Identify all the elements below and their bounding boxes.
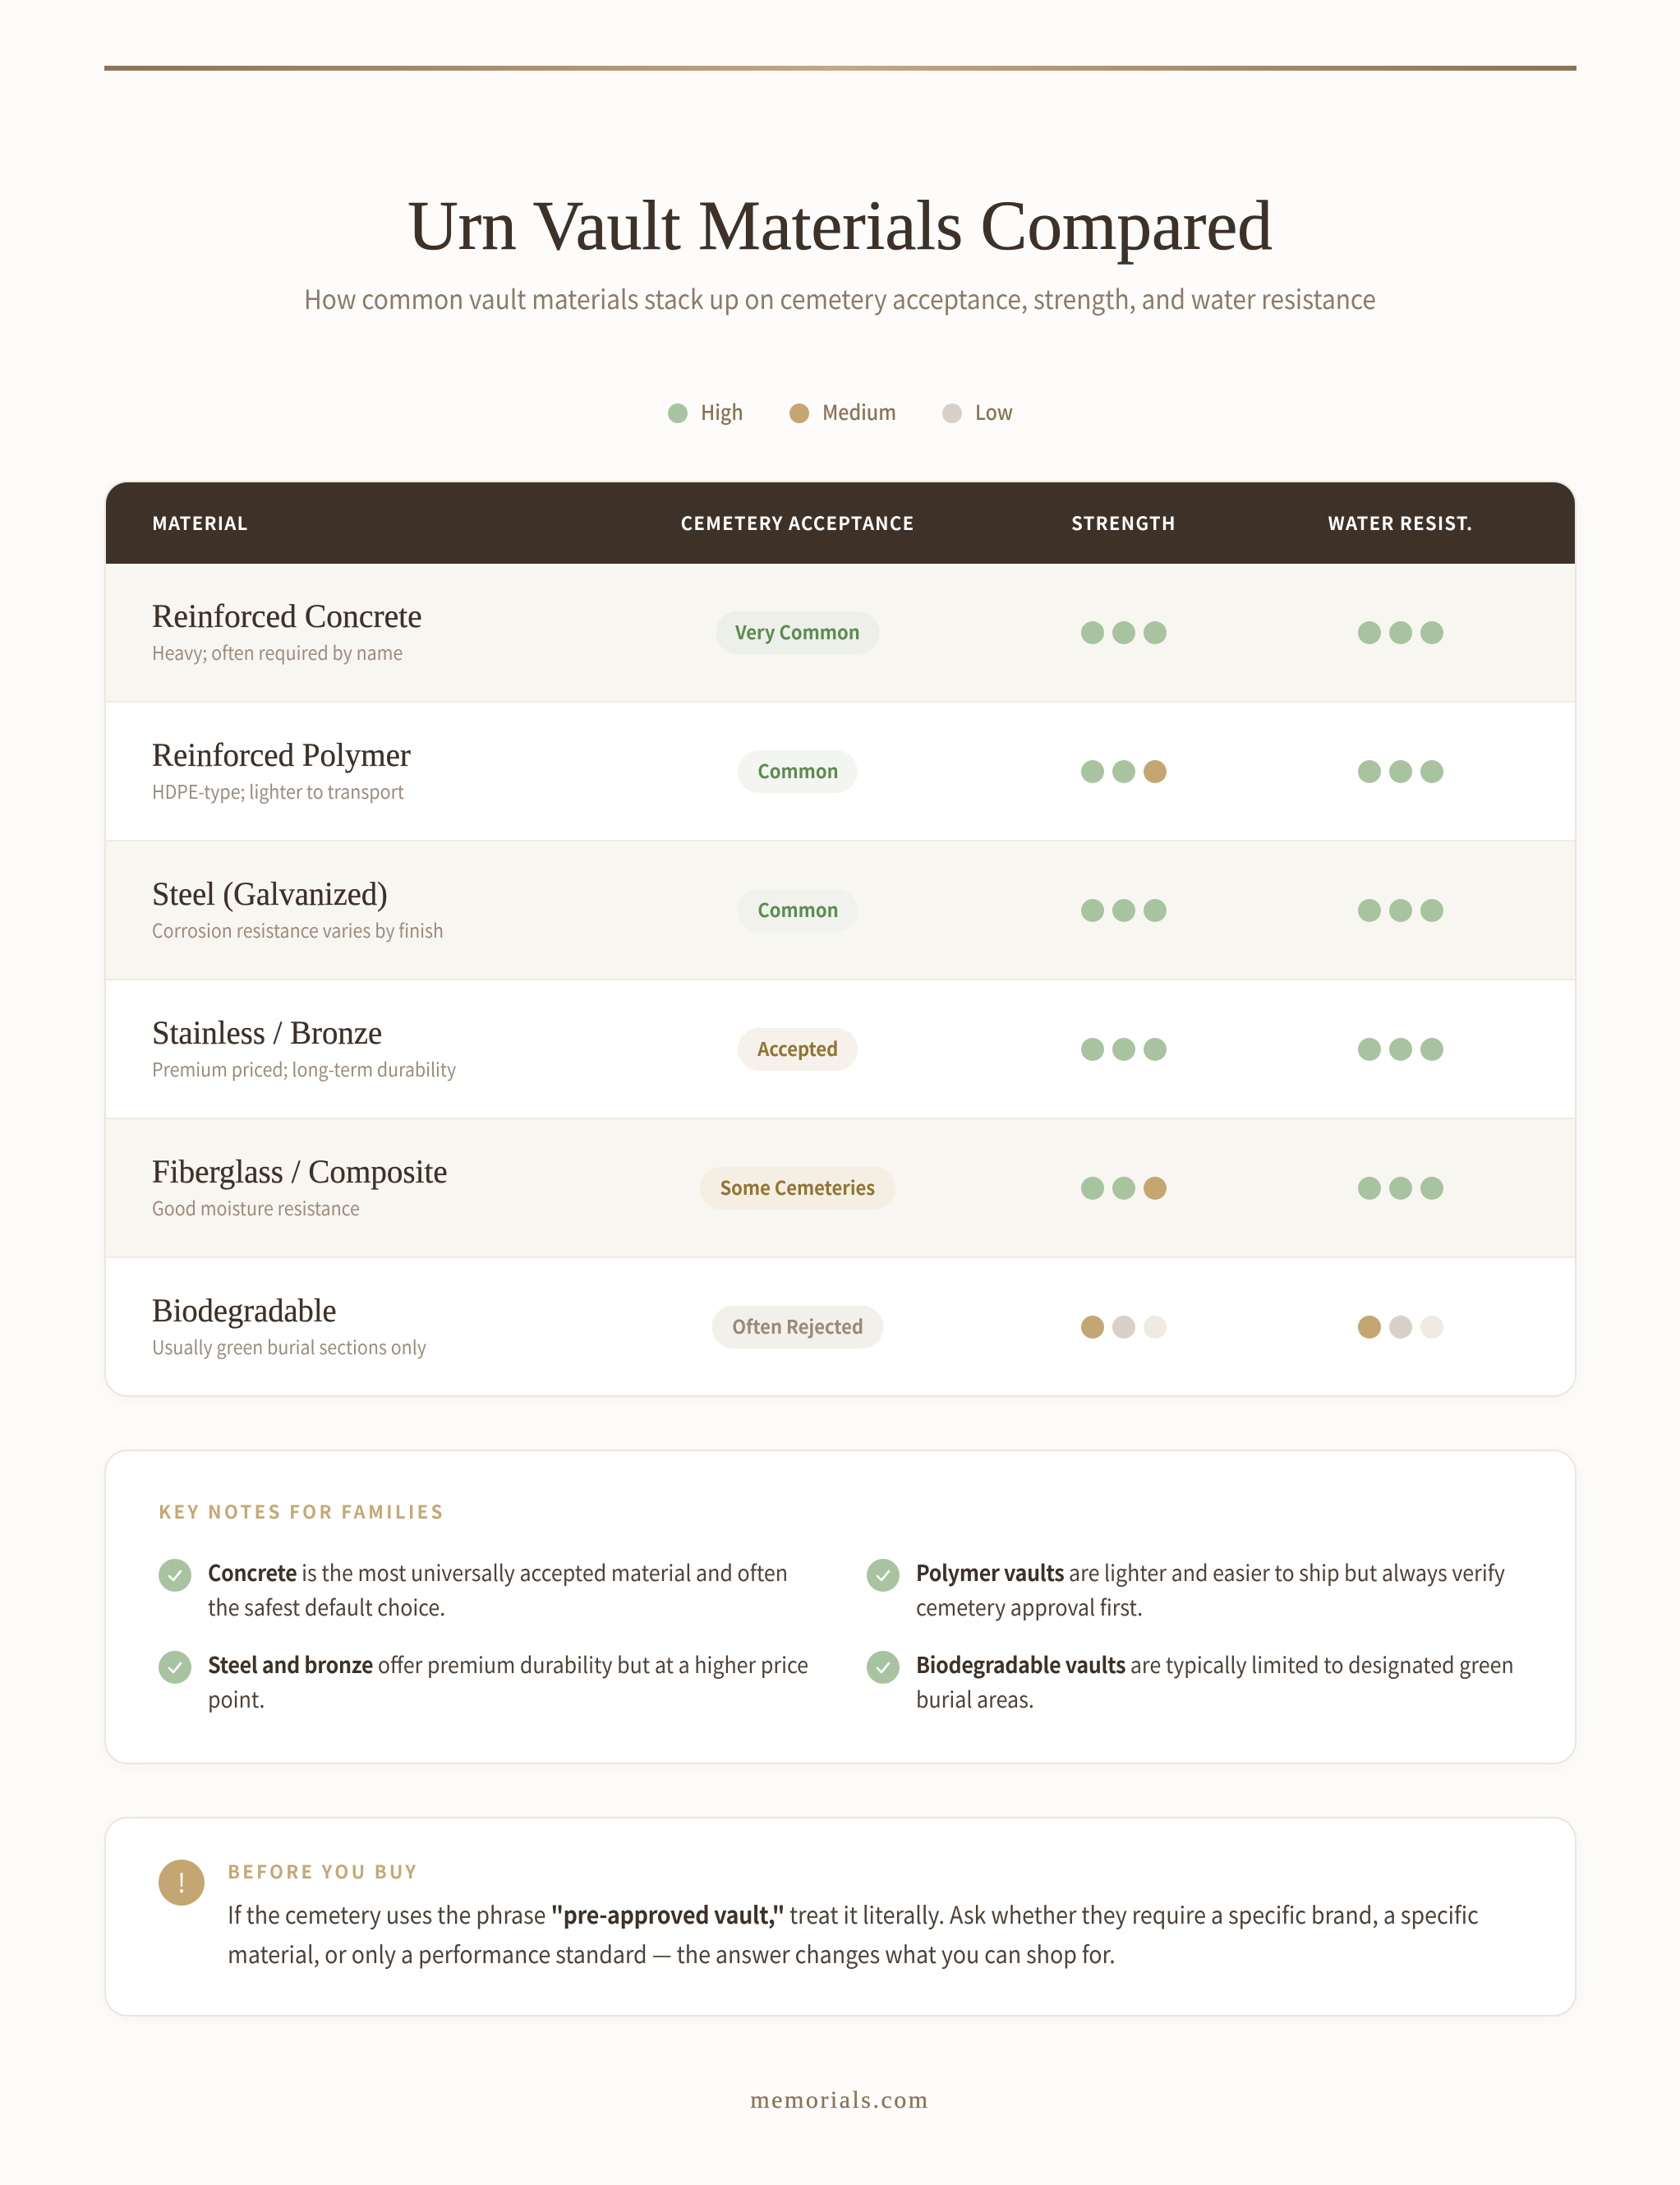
heading: key notes: KEY NOTES FOR FAMILIES — [159, 1498, 445, 1524]
column heading: acceptance: CEMETERY ACCEPTANCE — [681, 509, 914, 536]
note: polymer: Polymer vaults are lighter and easier to ship but always verify — [916, 1556, 1505, 1588]
note: steel and bronze — [159, 1648, 808, 1714]
note: steel and bronze: point. — [208, 1682, 265, 1714]
row: fiberglass — [106, 1119, 1575, 1258]
title: Urn Vault Materials Compared — [407, 186, 1273, 265]
row: stainless bronze — [106, 980, 1575, 1119]
row: reinforced polymer: Common — [757, 756, 838, 784]
row: reinforced polymer: HDPE-type; lighter to transport — [152, 777, 404, 804]
panel: before you buy — [104, 1817, 1576, 2017]
callout text — [228, 1897, 1479, 1971]
row: steel: Corrosion resistance varies by finish — [152, 915, 444, 943]
row: reinforced concrete: Very Common — [735, 617, 860, 645]
note: concrete — [159, 1556, 788, 1622]
note: biodegradable: Biodegradable vaults are typically limited to designated green — [916, 1648, 1514, 1680]
column heading: water resistance: WATER RESIST. — [1328, 509, 1473, 536]
column heading: material: MATERIAL — [152, 509, 249, 536]
note: polymer: cemetery approval first. — [916, 1590, 1143, 1622]
row: biodegradable — [152, 1292, 1443, 1360]
row: steel: Common — [757, 895, 838, 923]
subtitle: How common vault materials stack up on cemetery acceptance, strength, and water resistance — [304, 279, 1376, 317]
row: stainless bronze: Stainless / Bronze — [152, 1014, 382, 1051]
row: stainless bronze: Premium priced; long-term durability — [152, 1054, 456, 1082]
icon: exclamation: ! — [177, 1863, 186, 1901]
legend: low: Low — [975, 397, 1013, 426]
row: biodegradable: Often Rejected — [732, 1311, 863, 1339]
note: biodegradable — [867, 1648, 1514, 1714]
note: concrete: the safest default choice. — [208, 1590, 445, 1622]
note: concrete: Concrete is the most universally accepted material and often — [208, 1556, 788, 1588]
note: biodegradable: burial areas. — [916, 1682, 1034, 1714]
legend: high — [668, 397, 743, 426]
row: biodegradable: Usually green burial sections only — [152, 1332, 426, 1360]
row: fiberglass: Fiberglass / Composite — [152, 1153, 448, 1190]
legend: low — [942, 397, 1013, 426]
legend: high: High — [701, 397, 743, 426]
legend — [668, 397, 1013, 426]
legend: medium: Medium — [822, 397, 896, 426]
note: polymer — [867, 1556, 1505, 1622]
panel: key notes — [104, 1450, 1576, 1764]
footer: memorials.com — [750, 2086, 930, 2114]
row: stainless bronze: Accepted — [757, 1034, 838, 1062]
column heading: strength: STRENGTH — [1071, 509, 1176, 536]
row: biodegradable: Biodegradable — [152, 1292, 337, 1329]
row: steel: Steel (Galvanized) — [152, 875, 388, 912]
table header — [106, 482, 1575, 565]
legend: medium — [789, 397, 896, 426]
heading: before you buy: BEFORE YOU BUY — [228, 1858, 418, 1884]
row: reinforced polymer: Reinforced Polymer — [152, 736, 411, 773]
callout text: material, or only a performance standard — the answer changes what you can shop for. — [228, 1936, 1116, 1971]
callout text: If the cemetery uses the phrase "pre-approved vault," treat it literally. Ask whether they require a specific brand, a specific — [228, 1897, 1479, 1931]
row: reinforced polymer — [106, 703, 1575, 841]
row: reinforced concrete — [106, 564, 1575, 703]
panel: comparison table — [104, 481, 1576, 1397]
row: fiberglass: Good moisture resistance — [152, 1193, 360, 1221]
top rule — [104, 66, 1576, 71]
row: fiberglass: Some Cemeteries — [720, 1173, 875, 1201]
note: steel and bronze: Steel and bronze offer premium durability but at a higher price — [208, 1648, 808, 1680]
row: steel — [106, 841, 1575, 980]
row: reinforced concrete: Reinforced Concrete — [152, 597, 422, 634]
icon: exclamation — [159, 1860, 205, 1906]
row: reinforced concrete: Heavy; often required by name — [152, 638, 403, 666]
